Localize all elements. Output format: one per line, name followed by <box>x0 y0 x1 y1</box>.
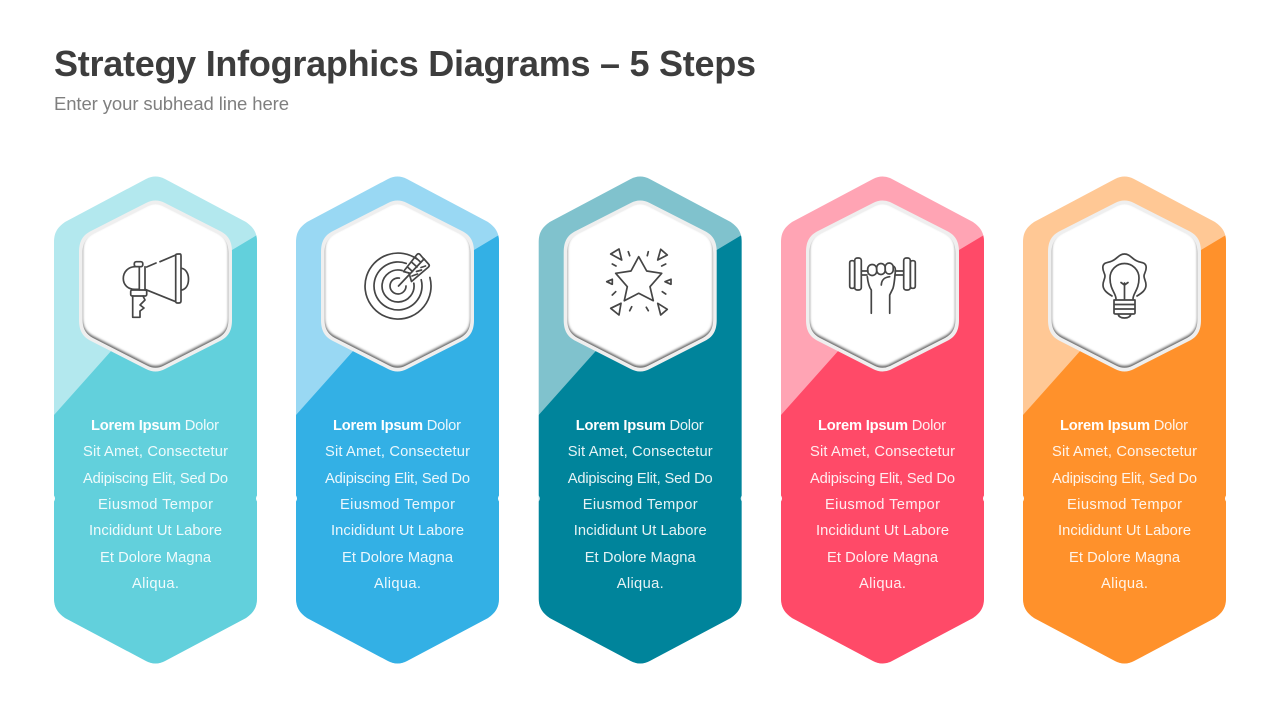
icon: light bulb with gear <box>1103 254 1146 318</box>
text block <box>1052 418 1197 592</box>
icon badge ring <box>1048 200 1201 372</box>
text block: Aliqua. <box>132 576 179 592</box>
text block: Lorem Ipsum Dolor <box>1060 418 1188 434</box>
card background <box>1023 176 1226 664</box>
text block: Et Dolore Magna <box>100 550 212 566</box>
text block: Lorem Ipsum Dolor <box>576 418 704 434</box>
panel: step 5 light bulb <box>1023 176 1226 664</box>
badge inner shadow <box>567 234 714 368</box>
card background <box>54 176 257 664</box>
panel: step 1 megaphone <box>54 176 257 664</box>
badge inner shadow <box>1052 234 1198 368</box>
text block: Et Dolore Magna <box>342 550 454 566</box>
text block: Adipiscing Elit, Sed Do <box>810 471 955 487</box>
text block: Lorem Ipsum Dolor <box>333 418 461 434</box>
badge inner shadow <box>82 216 228 368</box>
text block: Et Dolore Magna <box>1069 550 1181 566</box>
card background <box>781 176 984 664</box>
icon badge face <box>82 204 228 368</box>
edge notches <box>296 496 499 502</box>
icon: megaphone <box>123 254 188 317</box>
text block: Aliqua. <box>617 576 664 592</box>
text block: Eiusmod Tempor <box>825 497 940 513</box>
text block: Et Dolore Magna <box>827 550 939 566</box>
text block <box>568 418 713 592</box>
text block: Eiusmod Tempor <box>1067 497 1182 513</box>
panel: step 4 dumbbell <box>781 176 984 664</box>
text block: Incididunt Ut Labore <box>816 523 949 539</box>
text block: Aliqua. <box>1101 576 1148 592</box>
card colour fill <box>1023 235 1226 664</box>
text block: Sit Amet, Consectetur <box>1052 444 1197 460</box>
text block <box>810 418 955 592</box>
icon badge ring <box>79 200 232 372</box>
panel: step 3 star <box>538 176 742 664</box>
text block: Incididunt Ut Labore <box>331 523 464 539</box>
text block: Incididunt Ut Labore <box>1058 523 1191 539</box>
badge inner shadow <box>810 234 956 368</box>
icon badge face <box>324 204 470 368</box>
text block: Sit Amet, Consectetur <box>325 444 470 460</box>
text block: Aliqua. <box>859 576 906 592</box>
subhead: Enter your subhead line here <box>54 93 289 114</box>
badge inner shadow <box>324 234 470 368</box>
card colour fill <box>781 235 984 664</box>
card background <box>539 176 742 664</box>
title: Strategy Infographics Diagrams – 5 Steps <box>54 43 756 84</box>
text block: Lorem Ipsum Dolor <box>91 418 219 434</box>
icon badge ring <box>321 200 474 372</box>
text block: Adipiscing Elit, Sed Do <box>325 471 470 487</box>
card background <box>296 176 499 664</box>
text block <box>325 418 470 592</box>
card colour fill <box>538 236 742 664</box>
text block: Sit Amet, Consectetur <box>568 444 713 460</box>
icon: target with arrow <box>365 253 431 319</box>
panel: step 2 target <box>296 176 499 664</box>
text block: Adipiscing Elit, Sed Do <box>83 471 228 487</box>
text block: Adipiscing Elit, Sed Do <box>1052 471 1197 487</box>
text block: Eiusmod Tempor <box>583 497 698 513</box>
icon badge face <box>567 204 713 368</box>
edge notches <box>781 496 984 502</box>
card colour fill <box>296 235 499 664</box>
edge notches <box>1023 496 1226 502</box>
text block: Adipiscing Elit, Sed Do <box>568 471 713 487</box>
text block: Eiusmod Tempor <box>98 497 213 513</box>
text block: Lorem Ipsum Dolor <box>818 418 946 434</box>
text block: Incididunt Ut Labore <box>574 523 707 539</box>
text block: Eiusmod Tempor <box>340 497 455 513</box>
text block: Incididunt Ut Labore <box>89 523 222 539</box>
edge notches <box>54 496 257 502</box>
icon badge ring <box>564 200 717 372</box>
text block: Aliqua. <box>374 576 421 592</box>
edge notches <box>539 496 742 502</box>
text block <box>83 418 228 592</box>
icon badge face <box>1052 204 1198 368</box>
icon: star with sparkles <box>607 249 671 315</box>
icon badge face <box>810 204 956 368</box>
icon: fist lifting dumbbell <box>850 258 915 313</box>
card colour fill <box>54 235 257 664</box>
text block: Sit Amet, Consectetur <box>810 444 955 460</box>
icon badge ring <box>806 200 959 372</box>
text block: Et Dolore Magna <box>585 550 697 566</box>
text block: Sit Amet, Consectetur <box>83 444 228 460</box>
